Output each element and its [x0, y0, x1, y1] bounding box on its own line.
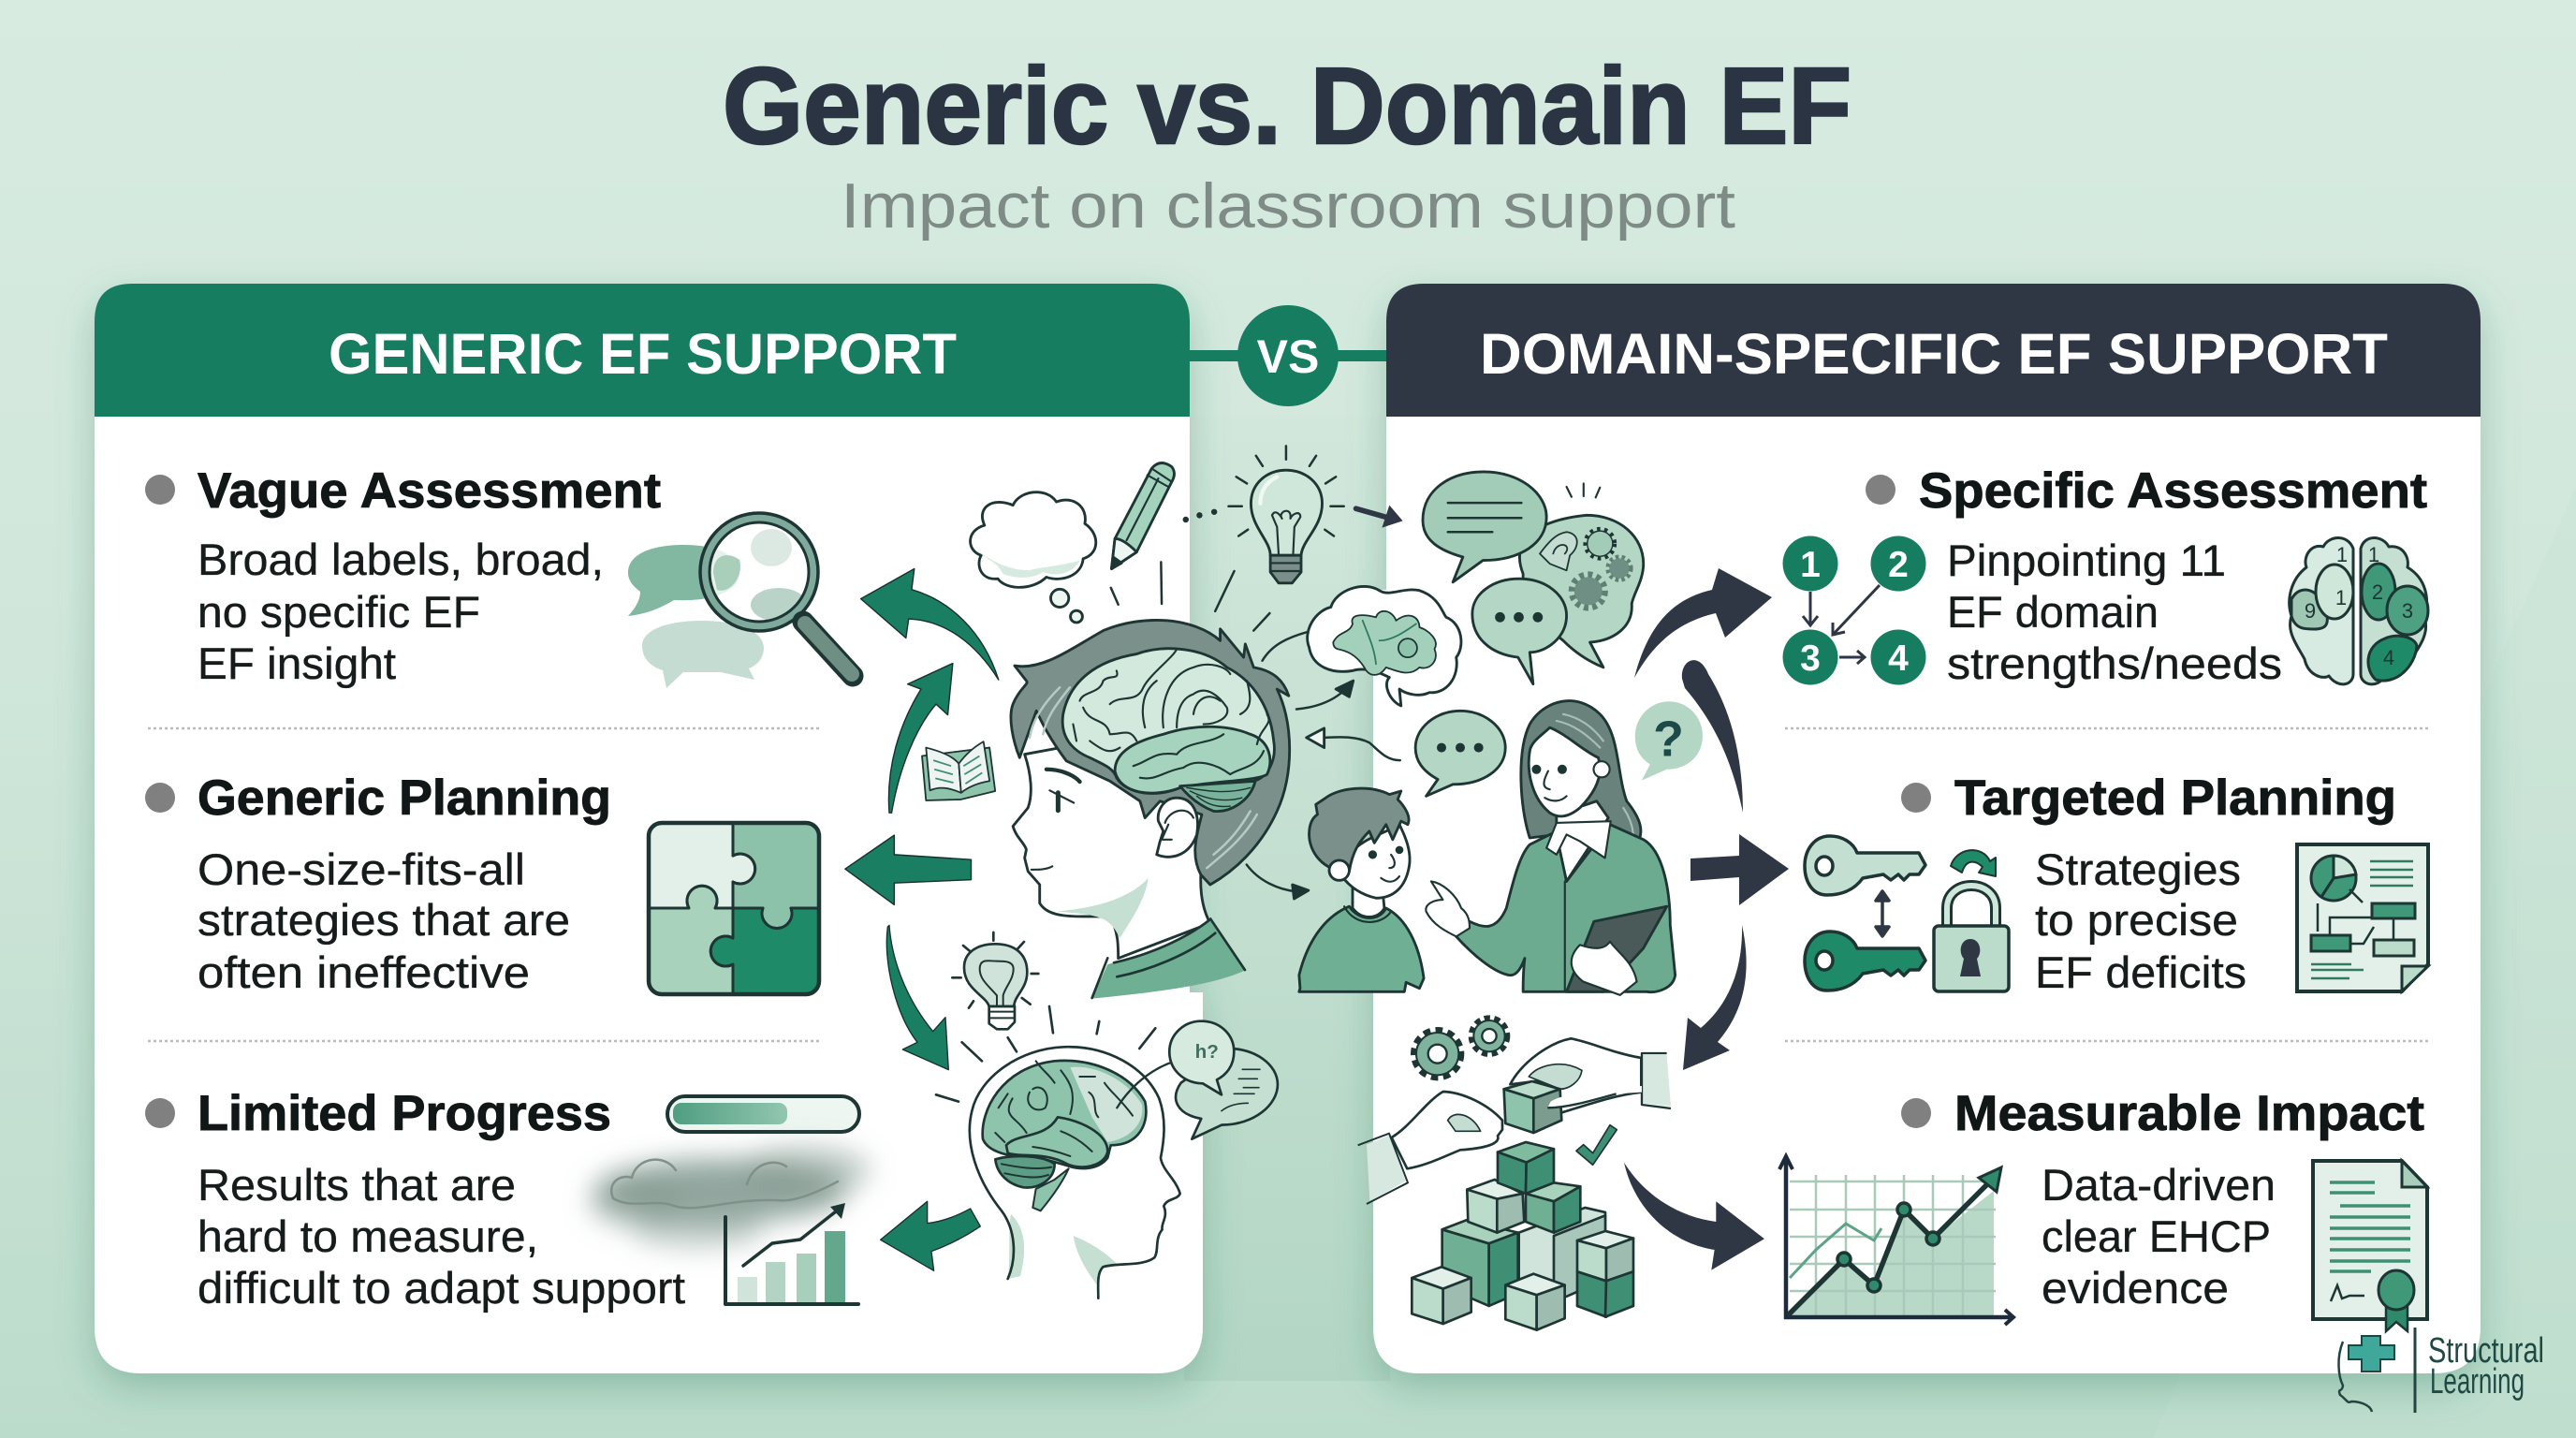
- icon: small speech bubbles: h?: [1195, 1041, 1219, 1063]
- icon: question bubble: ?: [1653, 712, 1684, 767]
- icon: numbered sequence 1 to 4: 3: [1800, 638, 1821, 679]
- facial features: [1046, 770, 1080, 782]
- vs badge: [1190, 305, 1386, 406]
- subtitle: Impact on classroom support: [841, 170, 1735, 242]
- neck shadow: [1057, 878, 1149, 938]
- item: specific assessment: Pinpointing 11: [1947, 536, 2226, 585]
- item: vague assessment: EF insight: [198, 638, 396, 688]
- arrows: generic, green: [845, 568, 999, 904]
- right hand: [1510, 1038, 1641, 1114]
- item: targeted planning: Targeted Planning: [1954, 770, 2396, 826]
- item: generic planning: Generic Planning: [198, 770, 611, 826]
- check mark: [1576, 1125, 1617, 1165]
- illustration: small boy: [1299, 788, 1424, 991]
- small left cube: [1412, 1267, 1471, 1289]
- item: vague assessment: Vague Assessment: [198, 463, 661, 519]
- title: Generic vs. Domain EF: [723, 45, 1852, 167]
- icon: keys and lock: [1805, 836, 2009, 991]
- face: [1013, 741, 1210, 959]
- big green cube: [1442, 1220, 1518, 1243]
- icon: numbered sequence 1 to 4: 1: [1800, 545, 1821, 585]
- item: targeted planning: [1901, 770, 2396, 997]
- panel: domain-specific EF support: [1373, 284, 2481, 1373]
- tablet: [1567, 906, 1667, 991]
- neck and collar: [1557, 801, 1608, 881]
- icon: dots speech bubble: [1415, 711, 1505, 796]
- icon: magnifier and speech bubbles: [628, 513, 853, 688]
- ear: [1157, 798, 1197, 857]
- icon: numbered brain: 1: [2368, 543, 2379, 566]
- icon: numbered sequence 1 to 4: [1782, 536, 1926, 685]
- item: generic planning: often ineffective: [198, 947, 530, 997]
- arrows: generic, lower green: [881, 925, 980, 1270]
- icon: numbered sequence 1 to 4: 4: [1888, 638, 1909, 679]
- icon: gears: [1414, 1019, 1507, 1077]
- background light diagonal: [2153, 487, 2576, 1438]
- arrow: domain-specific, lower right: [1624, 1163, 1764, 1270]
- illustration: child shirt collar: [1092, 919, 1245, 999]
- icon: numbered brain: [2290, 537, 2428, 684]
- item: specific assessment: [1866, 463, 2427, 688]
- item: generic planning: [145, 770, 611, 997]
- sweater: [1456, 825, 1676, 992]
- item: targeted planning: to precise: [2035, 895, 2238, 945]
- mid right cube: [1526, 1182, 1580, 1201]
- heading: generic EF support: GENERIC EF SUPPORT: [329, 322, 957, 386]
- icon: progress bar: [667, 1096, 859, 1132]
- item: specific assessment: strengths/needs: [1947, 638, 2282, 688]
- item: limited progress: hard to measure,: [198, 1211, 538, 1261]
- header: domain-specific: [1386, 284, 2481, 417]
- item: measurable impact: clear EHCP: [2042, 1211, 2271, 1261]
- right stack: [1577, 1231, 1633, 1248]
- icon: jigsaw puzzle: [649, 823, 819, 994]
- icon: question bubble: [1635, 701, 1703, 781]
- icon: numbered brain: 9: [2305, 599, 2316, 623]
- logo: Structural Learning: [2338, 1328, 2544, 1413]
- face: [1529, 727, 1600, 816]
- icon: small light bulb: [936, 932, 1155, 1102]
- item: vague assessment: [145, 463, 661, 688]
- icon: stacked cubes with hands: [1358, 1038, 1671, 1330]
- item: targeted planning: EF deficits: [2035, 947, 2247, 997]
- item: limited progress: [145, 1086, 685, 1313]
- icon: thought bubble with brain: [1308, 586, 1461, 706]
- icon: numbered brain: 4: [2383, 646, 2394, 669]
- brain: [1062, 649, 1274, 793]
- item: measurable impact: [1901, 1086, 2424, 1313]
- header: generic: [95, 284, 1190, 417]
- icon: thought cloud: [971, 492, 1096, 623]
- item: limited progress: Limited Progress: [198, 1086, 611, 1141]
- illustration: second head with brain: [970, 1047, 1182, 1299]
- logo: Structural Learning: Learning: [2430, 1362, 2525, 1401]
- heading: domain-specific EF support: DOMAIN-SPECIFIC EF SUPPORT: [1480, 322, 2388, 386]
- icon: light bulb: [1111, 446, 1344, 631]
- icon: numbered sequence 1 to 4: 2: [1888, 545, 1909, 585]
- item: specific assessment: Specific Assessment: [1919, 463, 2427, 519]
- icon: numbered brain: 2: [2372, 580, 2383, 604]
- icon: pencil: [1111, 463, 1174, 568]
- item: limited progress: difficult to adapt support: [198, 1263, 685, 1313]
- item: limited progress: Results that are: [198, 1160, 516, 1210]
- item: vague assessment: Broad labels, broad,: [198, 535, 604, 584]
- icon: certified document: [2313, 1161, 2427, 1331]
- hair: [1011, 620, 1290, 885]
- centre strip: [1184, 417, 1390, 1381]
- icon: open book: [922, 741, 995, 800]
- icon: planning document: [2297, 844, 2428, 991]
- icon: numbered brain: 1: [2336, 543, 2348, 566]
- icon: numbered brain: 1: [2335, 586, 2347, 609]
- item: measurable impact: Measurable Impact: [1954, 1086, 2424, 1141]
- item: generic planning: One-size-fits-all: [198, 844, 525, 894]
- pointing hand: [1426, 881, 1470, 936]
- arrows: domain-specific, dark: [1634, 568, 1789, 1070]
- icon: speech bubbles with gears: [1423, 472, 1644, 684]
- big light cube: [1519, 1208, 1605, 1295]
- icon: numbered brain: 3: [2402, 599, 2413, 623]
- held cube: [1504, 1081, 1560, 1098]
- icon: small bar chart: [725, 1203, 858, 1304]
- illustration: child profile with brain: [1011, 620, 1290, 959]
- item: measurable impact: Data-driven: [2042, 1160, 2276, 1210]
- item: targeted planning: Strategies: [2035, 844, 2241, 894]
- panel: generic EF support: [95, 284, 1203, 1373]
- item: generic planning: strategies that are: [198, 895, 570, 945]
- icon: line chart: [1779, 1156, 2013, 1325]
- item: measurable impact: evidence: [2042, 1263, 2229, 1313]
- item: vague assessment: no specific EF: [198, 587, 480, 637]
- vs badge: VS: [1257, 330, 1319, 383]
- logo: Structural Learning: Structural: [2428, 1331, 2544, 1371]
- illustration: teacher with tablet: [1426, 701, 1676, 995]
- top cube: [1498, 1142, 1554, 1163]
- icon: fog cloud: [590, 1146, 871, 1248]
- connector arrows: brain and bubbles: [1247, 632, 1400, 899]
- icon: small speech bubbles: [1169, 1021, 1278, 1139]
- left hand: [1392, 1092, 1502, 1168]
- item: specific assessment: EF domain: [1947, 587, 2159, 637]
- arrow: bulb to bubbles: [1356, 506, 1403, 528]
- small mid cube: [1505, 1274, 1565, 1295]
- hair: [1521, 701, 1641, 844]
- mid left cube: [1467, 1180, 1523, 1199]
